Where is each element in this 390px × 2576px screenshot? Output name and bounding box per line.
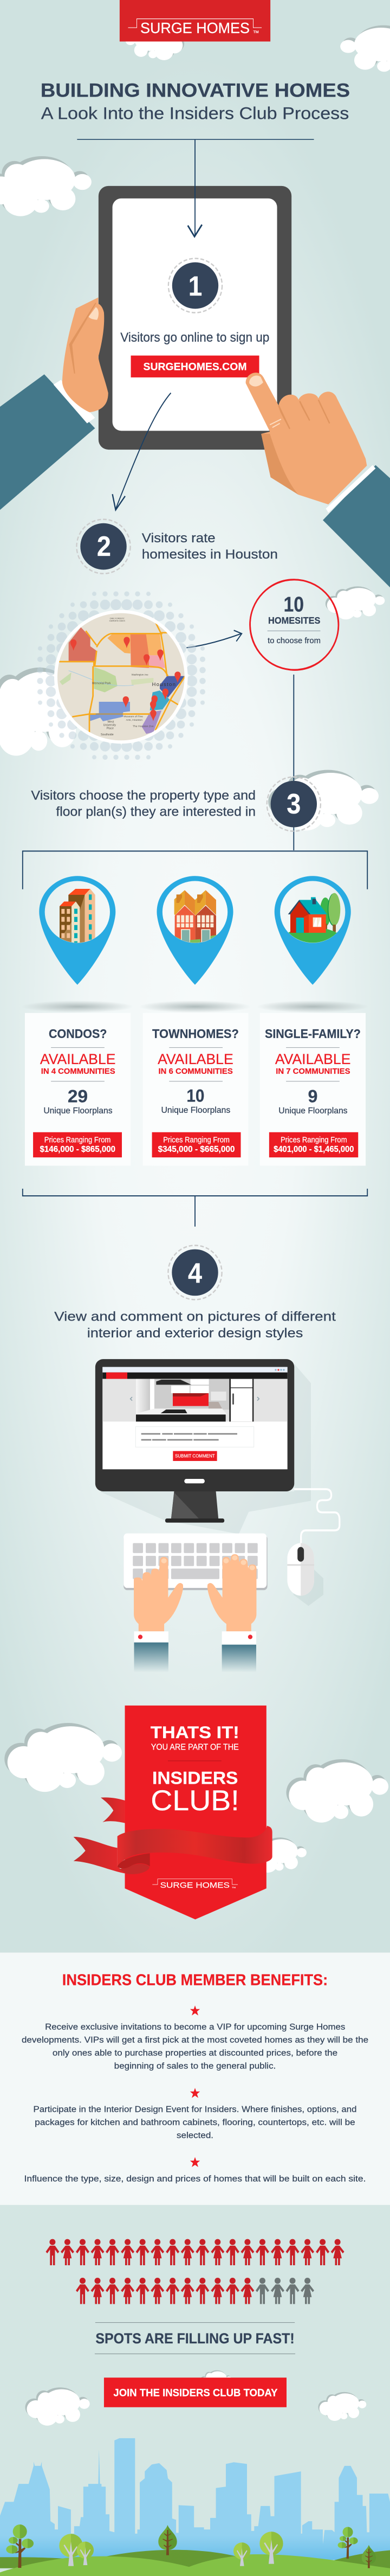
cloud: top right of homesites (326, 586, 385, 619)
tree: right leaf (362, 2545, 376, 2568)
pin: townhomes (157, 876, 233, 985)
tree: left round pair (59, 2534, 94, 2566)
banner logo (152, 1879, 238, 1890)
map circle: Southside (101, 733, 114, 736)
illustration: single family (288, 893, 340, 943)
card: townhomes: IN 6 COMMUNITIES (159, 1066, 233, 1075)
icon: townhomes (173, 890, 218, 944)
section: property cards (23, 1013, 367, 1299)
button: surgehomes.com: SURGEHOMES.COM (143, 361, 247, 373)
benefit 1: developments. VIPs will get a first pick at the most coveted homes as they will be the (22, 2035, 368, 2045)
logo (120, 0, 270, 42)
banner: THATS IT! (151, 1723, 239, 1742)
step 2 text: Visitors rate (142, 530, 216, 545)
keyboard (123, 1534, 268, 1590)
section: spots and city (0, 2157, 390, 2576)
mouse (287, 1543, 323, 1606)
city skyline (0, 2438, 390, 2560)
map with halftone (37, 591, 206, 760)
cloud: left of banner (4, 1723, 122, 1792)
step 1 text: Visitors go online to sign up (120, 330, 269, 344)
bracket: to step 4 (23, 1189, 367, 1227)
map circle: Place (107, 727, 114, 730)
card: single-family: IN 7 COMMUNITIES (276, 1066, 350, 1075)
cloud: behind ribbon (248, 1837, 307, 1873)
banner: CLUB! (151, 1784, 239, 1816)
card: townhomes: $345,000 - $665,000 (158, 1145, 235, 1154)
card: single-family: Prices Ranging From (281, 1136, 347, 1144)
card: condos: AVAILABLE (40, 1052, 116, 1068)
step 4 badge (168, 1245, 222, 1299)
benefit 3: Influence the type, size, design and prices of homes that will be built on each site. (24, 2174, 366, 2184)
map circle: Memorial Park (92, 682, 111, 685)
monitor screen (102, 1367, 288, 1469)
card: single-family: SINGLE-FAMILY? (265, 1027, 361, 1041)
cloud: under logo (126, 25, 184, 60)
arrow: title to step 1 (77, 139, 314, 236)
trees (6, 2524, 376, 2568)
arm: left sleeve (0, 374, 95, 510)
pin shadows (21, 1001, 369, 1013)
cloud: right of button (318, 2392, 366, 2421)
logo: TM (253, 30, 259, 34)
subtitle: A Look Into the Insiders Club Process (41, 104, 349, 123)
pin: condos (39, 876, 115, 985)
cloud: behind button (200, 2370, 231, 2391)
ribbon (74, 1797, 272, 1874)
arm: right sleeve (323, 465, 390, 587)
benefit 2: packages for kitchen and bathroom cabinets, flooring, countertops, etc. will be (35, 2118, 355, 2128)
map circle: Washington Ave (132, 673, 148, 676)
tree: right round pair (233, 2532, 283, 2566)
benefit 2 (34, 2088, 356, 2141)
benefit 1: Receive exclusive invitations to become a VIP for upcoming Surge Homes (45, 2022, 345, 2032)
card: townhomes: TOWNHOMES? (152, 1027, 239, 1041)
hand: right pointing (246, 373, 367, 504)
button: surgehomes.com (131, 356, 259, 377)
title: BUILDING INNOVATIVE HOMES (41, 80, 350, 101)
step 3 text: Visitors choose the property type and (31, 787, 256, 803)
banner logo: TM (232, 1886, 236, 1888)
step 4 text: View and comment on pictures of different (54, 1309, 336, 1324)
card: townhomes (143, 1013, 248, 1165)
map circle: Arts, Houston (126, 719, 142, 722)
callout: 10 homesites (245, 573, 343, 677)
cloud: right of banner (286, 1759, 388, 1823)
step 1 badge (168, 259, 222, 313)
card: single-family: AVAILABLE (275, 1052, 350, 1068)
map circle: University (103, 723, 116, 727)
monitor (95, 1359, 311, 1534)
map circle: Museum of Fine (123, 715, 143, 719)
hand: left (62, 297, 108, 412)
tree: left branching (6, 2524, 34, 2568)
step 4 text (54, 1309, 336, 1340)
hand: left typing (134, 1557, 183, 1673)
card: condos: IN 4 COMMUNITIES (41, 1066, 115, 1075)
benefit 2: Participate in the Interior Design Event for Insiders. Where finishes, options, and (34, 2105, 356, 2114)
spots heading: SPOTS ARE FILLING UP FAST! (95, 2331, 295, 2347)
people row 2 (76, 2278, 314, 2304)
section: sign up (0, 0, 390, 510)
card: condos: CONDOS? (49, 1027, 107, 1041)
benefits heading: INSIDERS CLUB MEMBER BENEFITS: (62, 1971, 328, 1989)
hand: right typing (207, 1554, 256, 1673)
cloud: left of button (25, 2387, 90, 2426)
arrow: step 1 to step 2 (113, 393, 171, 510)
card: condos: Unique Floorplans (43, 1106, 113, 1116)
step 2 badge (76, 520, 131, 574)
halftone dots (37, 591, 206, 760)
map circle: GARDEN OAKS (109, 619, 125, 622)
monitor screen: SUBMIT COMMENT (175, 1453, 215, 1458)
card: townhomes: Unique Floorplans (161, 1106, 230, 1115)
map circle: OAK FOREST/ (110, 617, 125, 619)
banner: INSIDERS (152, 1768, 238, 1788)
cloud: left of tablet (0, 156, 92, 216)
section: rate homesites (0, 465, 390, 889)
arrow: map to homesites (186, 630, 242, 648)
benefit 1: beginning of sales to the general public. (114, 2061, 276, 2071)
step 2 badge: 2 (97, 531, 111, 562)
icon: condo buildings (60, 889, 95, 945)
step 3 text (31, 787, 256, 819)
cable (294, 1489, 340, 1543)
step 2 text (142, 530, 278, 561)
benefit 2: selected. (177, 2131, 213, 2141)
map circle (54, 610, 188, 744)
card: single-family (260, 1013, 366, 1165)
connector: homesites to step 3 (292, 675, 295, 850)
callout: 10 homesites: HOMESITES (268, 616, 320, 626)
card: condos (25, 1013, 131, 1165)
section: design styles (54, 1309, 340, 1673)
benefit 1: only ones able to purchase properties at discounted prices, before the (53, 2048, 337, 2058)
card: condos: Prices Ranging From (44, 1136, 110, 1144)
card: single-family: Unique Floorplans (278, 1106, 348, 1116)
step 2 text: homesites in Houston (142, 547, 278, 561)
tablet (99, 186, 291, 450)
card: townhomes: AVAILABLE (158, 1052, 233, 1068)
people row 1 (46, 2239, 344, 2265)
step 1 badge: 1 (188, 271, 202, 302)
hills (0, 2550, 390, 2576)
card: townhomes: 10 (186, 1086, 204, 1106)
callout: 10 homesites: to choose from (268, 636, 321, 645)
pin: single-family (275, 876, 351, 985)
illustrations: condo and townhome (60, 889, 218, 945)
map circle: Houston (152, 682, 176, 687)
step 4 badge: 4 (188, 1258, 202, 1289)
ribbon and banner logo (74, 1797, 272, 1890)
tree: left leaf (158, 2525, 177, 2555)
cloud: large behind map (0, 668, 93, 756)
step 3 text: floor plan(s) they are interested in (56, 804, 256, 819)
card: condos: $146,000 - $865,000 (40, 1145, 115, 1154)
icon: house and trees (288, 893, 340, 943)
tree: right branching (338, 2527, 358, 2559)
map circle: The Houston Zoo (133, 725, 154, 728)
cloud: behind step 3 (268, 770, 379, 830)
card: single-family: 9 (308, 1086, 317, 1106)
benefit 3 (24, 2157, 366, 2184)
step 4 text: interior and exterior design styles (87, 1325, 303, 1340)
map circle: West (107, 720, 114, 723)
cloud: top right (340, 25, 390, 74)
benefit 1 (22, 2005, 368, 2071)
section: thats it (4, 1706, 388, 1919)
section: property types (21, 876, 369, 1013)
panel: member benefits (0, 1953, 390, 2205)
card: single-family: $401,000 - $1,465,000 (274, 1145, 354, 1154)
logo: SURGE HOMES (140, 20, 250, 37)
banner logo: SURGE HOMES (160, 1881, 230, 1890)
button: join: JOIN THE INSIDERS CLUB TODAY (113, 2386, 277, 2399)
step 3 badge (267, 777, 321, 831)
bracket: property types (23, 851, 367, 889)
card: condos: 29 (68, 1086, 88, 1106)
card: townhomes: Prices Ranging From (163, 1136, 230, 1144)
banner: YOU ARE PART OF THE (151, 1743, 239, 1752)
step 3 badge: 3 (287, 789, 301, 820)
button: join (104, 2378, 287, 2407)
banner (125, 1706, 266, 1919)
callout: 10 homesites: 10 (283, 593, 304, 616)
